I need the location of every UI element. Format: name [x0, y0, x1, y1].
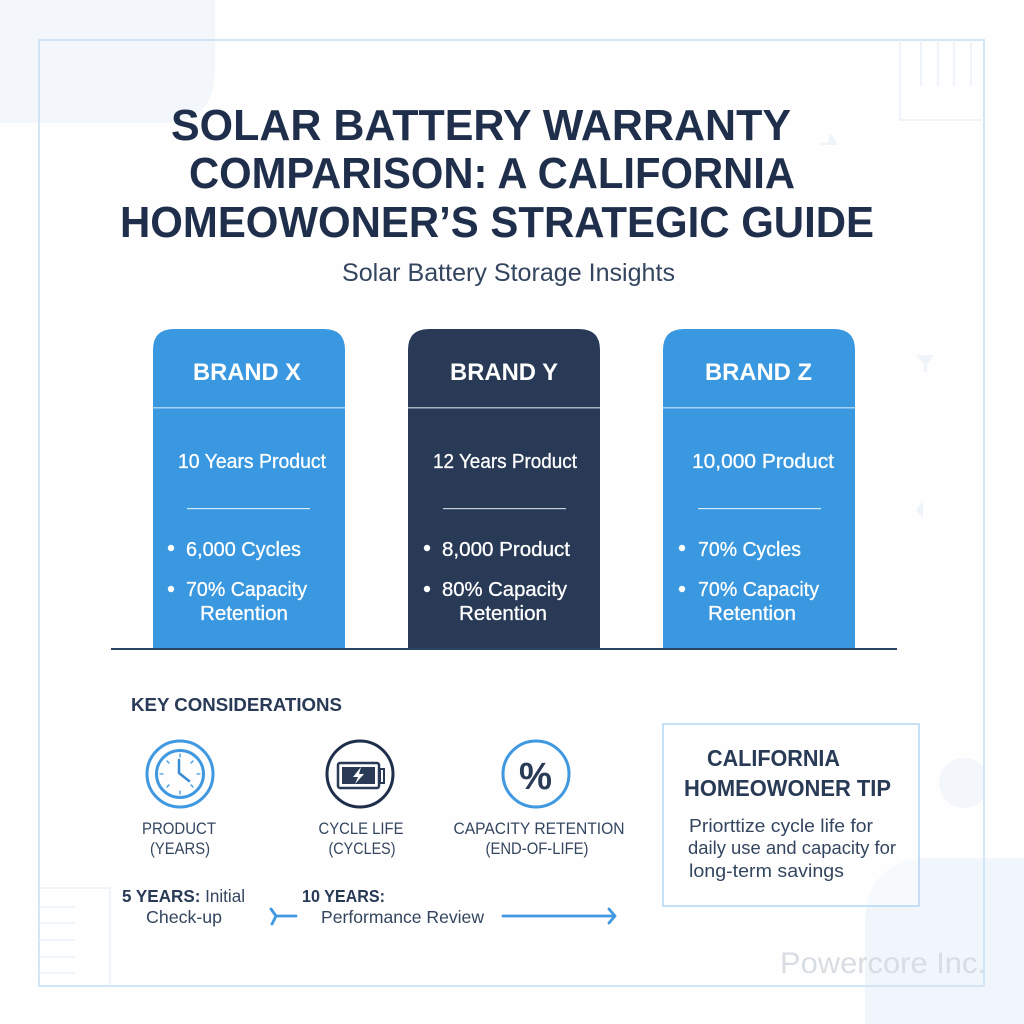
timeline: 5 years: 5 YEARS: Initial — [122, 886, 245, 906]
timeline: 5 years: Check-up — [146, 907, 222, 927]
panel: California tip: daily use and capacity for — [688, 837, 896, 858]
panel: Brand Z — [663, 329, 855, 649]
label: product years — [142, 820, 216, 858]
panel: Brand Y: Retention — [459, 602, 547, 625]
panel: Brand Y: 80% Capacity — [442, 578, 568, 601]
arrow: timeline connector — [271, 909, 296, 924]
panel: Brand X: BRAND X — [193, 359, 301, 386]
panel: Brand Y: BRAND Y — [450, 359, 558, 386]
panel: California tip: Priorttize cycle life for — [689, 815, 873, 836]
panel: Brand X: 6,000 Cycles — [186, 538, 301, 561]
timeline: 10 years: 10 YEARS: — [302, 886, 385, 906]
panel: Brand X: 10 Years Product — [178, 450, 326, 473]
panel: California tip: HOMEOWONER TIP — [684, 775, 891, 801]
subtitle: Solar Battery Storage Insights — [342, 259, 675, 287]
panel: Brand Y: 8,000 Product — [442, 538, 570, 561]
title: HOMEOWONER’S STRATEGIC GUIDE — [120, 198, 874, 247]
panel: Brand Y — [408, 329, 600, 649]
panel: Brand X: Retention — [200, 602, 288, 625]
timeline: 10 years: Performance Review — [321, 907, 484, 927]
icon: percent: % — [519, 756, 552, 798]
label: cycle life: (CYCLES) — [328, 840, 396, 858]
background shape: bottom-right corner — [865, 858, 1024, 1024]
panel: Brand Z: BRAND Z — [705, 359, 812, 386]
label: cycle life — [318, 820, 404, 858]
timeline: 5 years — [122, 886, 245, 927]
panel: California tip: long-term savings — [689, 860, 844, 881]
label: capacity retention: (END-OF-LIFE) — [486, 840, 588, 858]
icon: percent — [503, 741, 569, 807]
panel: Brand Y: 12 Years Product — [433, 450, 577, 473]
panel: Brand Z: 70% Capacity — [698, 578, 820, 601]
panel: California tip — [663, 724, 919, 906]
label: cycle life: CYCLE LIFE — [318, 820, 404, 838]
heading: key considerations: KEY CONSIDERATIONS — [131, 694, 342, 715]
watermark: Powercore Inc. — [780, 947, 986, 980]
panel: Brand Z: 10,000 Product — [692, 450, 834, 473]
arrow: timeline end — [503, 909, 615, 923]
panel: Brand Z: Retention — [708, 602, 796, 625]
label: product years: PRODUCT — [142, 820, 216, 838]
title: SOLAR BATTERY WARRANTY — [171, 101, 791, 150]
panel: Brand X — [153, 329, 345, 649]
label: product years: (YEARS) — [150, 840, 210, 858]
decoration: faint marks — [820, 133, 934, 518]
panel: Brand X: 70% Capacity — [186, 578, 308, 601]
chart baseline — [111, 648, 897, 650]
label: capacity retention — [454, 820, 624, 858]
decoration: bottom-left grid — [39, 888, 110, 986]
panel: Brand Z: 70% Cycles — [698, 538, 801, 561]
background shape: top-left corner — [0, 0, 215, 123]
title: COMPARISON: A CALIFORNIA — [189, 149, 795, 198]
panel: California tip: CALIFORNIA — [707, 745, 840, 771]
timeline: 10 years — [302, 886, 484, 927]
icon: battery — [327, 741, 393, 807]
label: capacity retention: CAPACITY RETENTION — [454, 820, 624, 838]
decoration: top-right grid — [900, 40, 984, 120]
background shape: small circle — [939, 758, 984, 808]
title — [120, 101, 874, 247]
icon: clock — [147, 741, 213, 807]
